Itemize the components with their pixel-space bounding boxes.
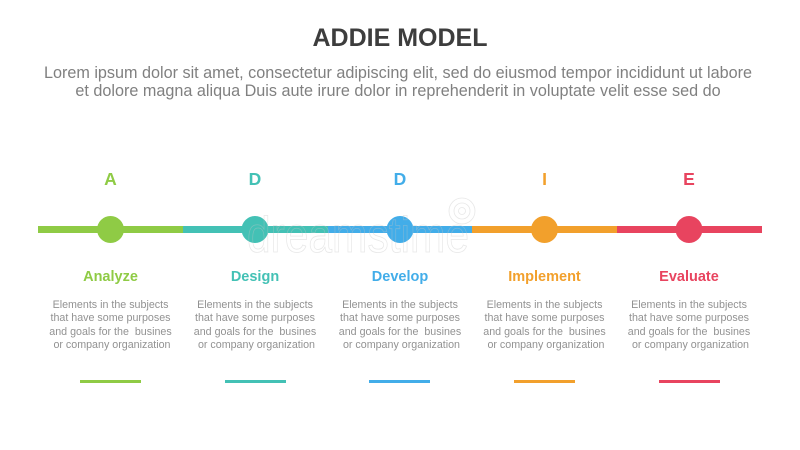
description: or company organization xyxy=(632,339,749,351)
description xyxy=(339,298,461,351)
description: or company organization xyxy=(343,339,460,351)
underline bar xyxy=(514,380,575,383)
letter D: D xyxy=(394,169,406,189)
segment and node: Design xyxy=(183,216,328,243)
description: Elements in the subjects xyxy=(487,298,602,310)
description: that have some purposes xyxy=(629,312,749,324)
description: and goals for the busines xyxy=(49,326,172,338)
description: or company organization xyxy=(53,339,170,351)
column: Analyze xyxy=(49,169,172,383)
segment and node: Evaluate xyxy=(617,216,762,243)
description xyxy=(483,298,606,351)
subtitle text xyxy=(44,64,752,100)
heading Develop: Develop xyxy=(372,269,428,285)
description xyxy=(194,298,316,351)
subtitle text: Lorem ipsum dolor sit amet, consectetur adipiscing elit, sed do eiusmod tempor incididunt ut labore xyxy=(44,64,752,82)
letter A: A xyxy=(104,169,117,189)
underline bar xyxy=(659,380,720,383)
description: Elements in the subjects xyxy=(342,298,458,310)
description xyxy=(628,298,750,351)
description: and goals for the busines xyxy=(194,326,316,338)
subtitle text: et dolore magna aliqua Duis aute irure dolor in reprehenderit in voluptate velit esse sed do xyxy=(75,82,721,100)
description: or company organization xyxy=(198,339,315,351)
description: that have some purposes xyxy=(484,312,604,324)
description: Elements in the subjects xyxy=(197,298,313,310)
column: Implement xyxy=(483,169,606,383)
segment and node: Implement xyxy=(472,216,617,243)
description: Elements in the subjects xyxy=(53,298,168,310)
segment and node: Analyze xyxy=(38,216,183,243)
description: that have some purposes xyxy=(50,312,170,324)
description: Elements in the subjects xyxy=(631,298,747,310)
column: Develop xyxy=(339,169,461,383)
description: or company organization xyxy=(487,339,604,351)
description xyxy=(49,298,172,351)
underline bar xyxy=(80,380,141,383)
heading Implement: Implement xyxy=(508,269,581,285)
description: and goals for the busines xyxy=(483,326,606,338)
underline bar xyxy=(225,380,286,383)
letter I: I xyxy=(542,169,547,189)
description: and goals for the busines xyxy=(339,326,461,338)
watermark: dreamstime xyxy=(247,207,469,263)
heading Design: Design xyxy=(231,269,279,285)
title: ADDIE MODEL xyxy=(312,24,488,52)
description: and goals for the busines xyxy=(628,326,750,338)
letter E: E xyxy=(683,169,695,189)
description: that have some purposes xyxy=(340,312,460,324)
heading Evaluate: Evaluate xyxy=(659,269,719,285)
description: that have some purposes xyxy=(195,312,315,324)
underline bar xyxy=(369,380,430,383)
column: Evaluate xyxy=(628,169,750,383)
segment and node: Develop xyxy=(328,216,472,243)
letter D: D xyxy=(249,169,261,189)
heading Analyze: Analyze xyxy=(83,269,138,285)
column: Design xyxy=(194,169,316,383)
